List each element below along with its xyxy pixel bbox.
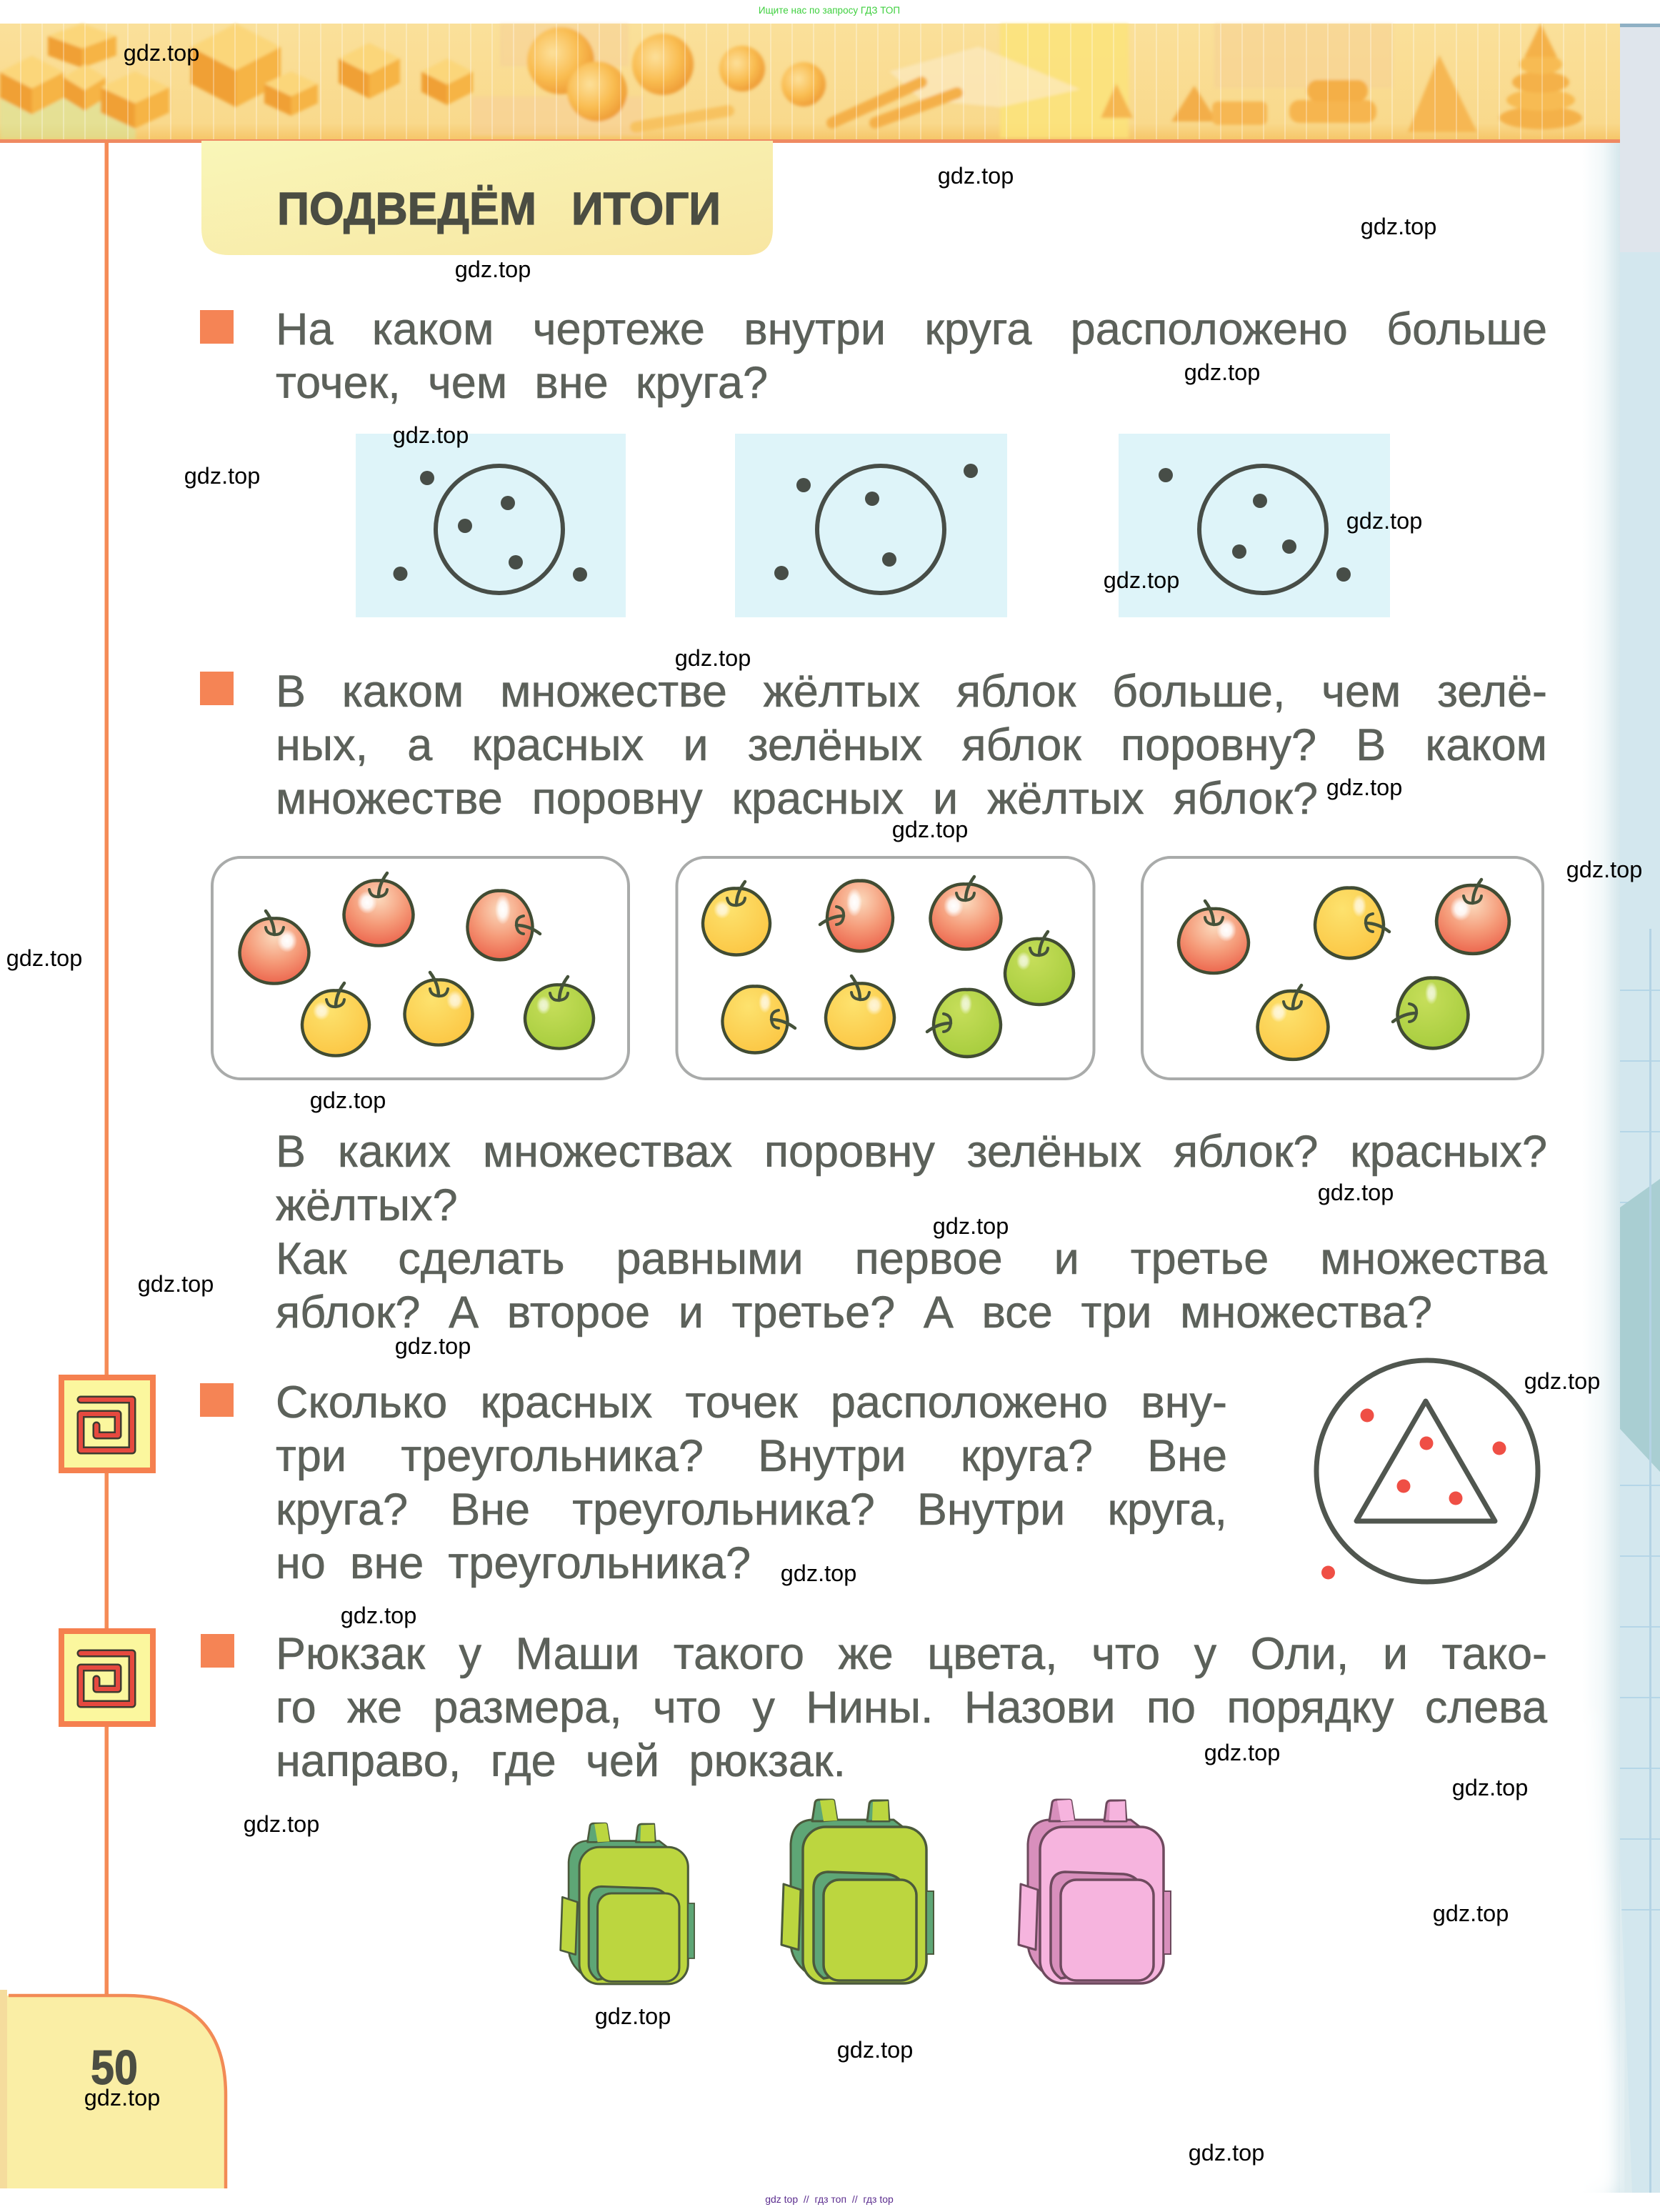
backpack 1: small green [561,1823,694,1984]
watermarks: gdz.top [1361,214,1436,239]
watermarks: gdz.top [1318,1180,1394,1205]
watermarks: gdz.top [1189,2140,1264,2166]
text: question 3: круга? Вне треугольника? Внутри круга, [276,1485,1227,1535]
watermarks: gdz.top [138,1271,214,1297]
diagram: circle, triangle and red points [1316,1360,1538,1582]
watermarks: gdz.top [341,1603,416,1628]
bullet: question 1 [200,310,234,344]
heading text [277,183,721,234]
text: question 1: На каком чертеже внутри круга расположено больше [276,304,1547,354]
text: question 2: множестве поровну красных и жёлтых яблок? [276,774,1318,824]
right page edge with notebook background [1571,24,1660,2193]
watermarks: gdz.top [1524,1368,1600,1394]
page number tab [0,1990,226,2188]
watermarks: gdz.top [1104,567,1179,593]
text: question 1 [276,304,1547,408]
watermarks: gdz.top [244,1811,319,1837]
watermarks: gdz.top [393,422,469,448]
text: question 3: Сколько красных точек расположено вну- [276,1377,1227,1428]
margin vertical line [104,141,109,1998]
watermarks: gdz.top [938,163,1014,189]
text: question 2: ных, а красных и зелёных яблок поровну? В каком [276,720,1547,770]
panel: circle drawing 2 [735,434,1007,617]
decorative top band with cubes and spheres [0,24,1620,143]
watermarks: gdz.top [837,2037,913,2063]
text: follow-up questions about apples: жёлтых? [276,1180,458,1230]
watermarks: gdz.top [124,40,199,66]
panel: circle drawing 1 [356,434,626,617]
panel: apple set 2 [677,857,1094,1079]
icon: spiral marker for question 4 [61,1631,153,1724]
watermarks: gdz.top [675,645,751,671]
bottom promo line: gdz top // гдз топ // гдз top [765,2193,894,2205]
watermarks: gdz.top [84,2085,160,2111]
heading panel [201,141,773,255]
watermarks: gdz.top [1326,774,1402,800]
text: question 1: точек, чем вне круга? [276,358,768,408]
text: follow-up questions about apples [276,1127,1547,1337]
watermarks: gdz.top [892,817,968,842]
panel: circle drawing 3 [1119,434,1390,617]
watermarks: gdz.top [1452,1775,1528,1800]
text: follow-up questions about apples: В каких множествах поровну зелёных яблок? красных? [276,1127,1547,1177]
watermarks: gdz.top [595,2003,671,2029]
watermarks: gdz.top [455,256,531,282]
watermarks: gdz.top [933,1213,1009,1239]
watermarks: gdz.top [1204,1740,1280,1765]
heading text: ИТОГИ [571,183,721,234]
text: question 4: го же размера, что у Нины. Назови по порядку слева [276,1683,1547,1733]
text: question 2 [276,667,1547,824]
icon: spiral marker for question 3 [61,1377,153,1470]
watermarks: gdz.top [1184,359,1260,385]
bullet: question 3 [200,1383,234,1417]
text: follow-up questions about apples: Как сделать равными первое и третье множества [276,1234,1547,1284]
watermarks: gdz.top [1433,1900,1509,1926]
page number: 50 [91,2041,138,2095]
text: question 3: но вне треугольника? [276,1538,751,1588]
watermarks: gdz.top [184,463,260,489]
text: question 3: три треугольника? Внутри круга? Вне [276,1431,1227,1481]
backpack 2: large green [781,1800,934,1983]
backpack 3: large pink [1019,1800,1171,1983]
watermarks: gdz.top [1346,508,1422,534]
bullet: question 4 [201,1634,234,1668]
text: question 4: направо, где чей рюкзак. [276,1736,846,1786]
watermarks: gdz.top [395,1333,471,1359]
watermarks: gdz.top [781,1560,856,1586]
top promo line: Ищите нас по запросу ГДЗ ТОП [759,5,900,16]
text: question 4 [276,1629,1547,1786]
text: question 4: Рюкзак у Маши такого же цвета, что у Оли, и тако- [276,1629,1547,1679]
watermarks: gdz.top [6,945,82,971]
text: follow-up questions about apples: яблок? А второе и третье? А все три множества? [276,1287,1432,1337]
text: question 2: В каком множестве жёлтых яблок больше, чем зелё- [276,667,1547,717]
watermarks: gdz.top [310,1087,386,1113]
bullet: question 2 [200,672,234,705]
text: question 3 [276,1377,1227,1588]
heading text: ПОДВЕДЁМ [277,183,536,234]
panel: apple set 3 [1142,857,1543,1079]
watermarks: gdz.top [1566,857,1642,882]
panel: apple set 1 [212,857,629,1079]
